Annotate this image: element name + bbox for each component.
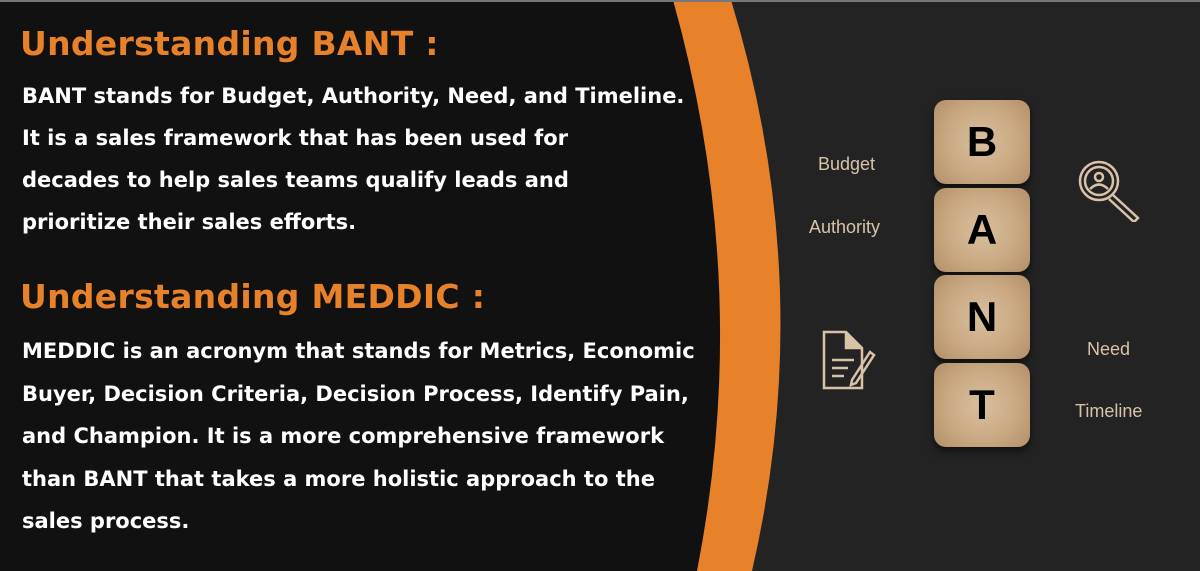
label: Need: Need bbox=[1087, 339, 1130, 359]
label: Budget: Budget bbox=[818, 154, 875, 174]
cubes: BANT bbox=[933, 100, 1031, 452]
cube A bbox=[934, 188, 1030, 272]
text block: BANT description: BANT stands for Budget, Authority, Need, and Timeline. bbox=[22, 84, 684, 108]
label: Timeline: Timeline bbox=[1075, 401, 1142, 421]
text block: MEDDIC description: than BANT that takes a more holistic approach to the bbox=[22, 466, 655, 490]
cube A: A bbox=[967, 206, 997, 253]
text block: BANT description: prioritize their sales efforts. bbox=[22, 210, 356, 234]
text block: BANT description: decades to help sales teams qualify leads and bbox=[22, 168, 569, 192]
cube B: B bbox=[967, 118, 997, 165]
label: Authority: Authority bbox=[809, 217, 880, 237]
text block: MEDDIC description bbox=[22, 339, 695, 533]
text block: MEDDIC description: and Champion. It is a more comprehensive framework bbox=[22, 424, 664, 448]
cube B bbox=[934, 100, 1030, 184]
heading: BANT: Understanding BANT : bbox=[20, 24, 439, 63]
icon: document with pen bbox=[822, 330, 876, 390]
text block: BANT description bbox=[22, 84, 684, 234]
background: right dark panel bbox=[650, 0, 1200, 571]
text block: MEDDIC description: sales process. bbox=[22, 509, 189, 533]
cube T: T bbox=[969, 381, 995, 428]
text block: MEDDIC description: Buyer, Decision Criteria, Decision Process, Identify Pain, bbox=[22, 382, 689, 406]
icon: magnifier person bbox=[1078, 160, 1140, 222]
text block: MEDDIC description: MEDDIC is an acronym that stands for Metrics, Economic bbox=[22, 339, 695, 363]
text block: BANT description: It is a sales framework that has been used for bbox=[22, 126, 568, 150]
cube N: N bbox=[967, 293, 997, 340]
cube T bbox=[934, 363, 1030, 447]
heading: MEDDIC: Understanding MEDDIC : bbox=[20, 277, 485, 316]
cube N bbox=[934, 275, 1030, 359]
